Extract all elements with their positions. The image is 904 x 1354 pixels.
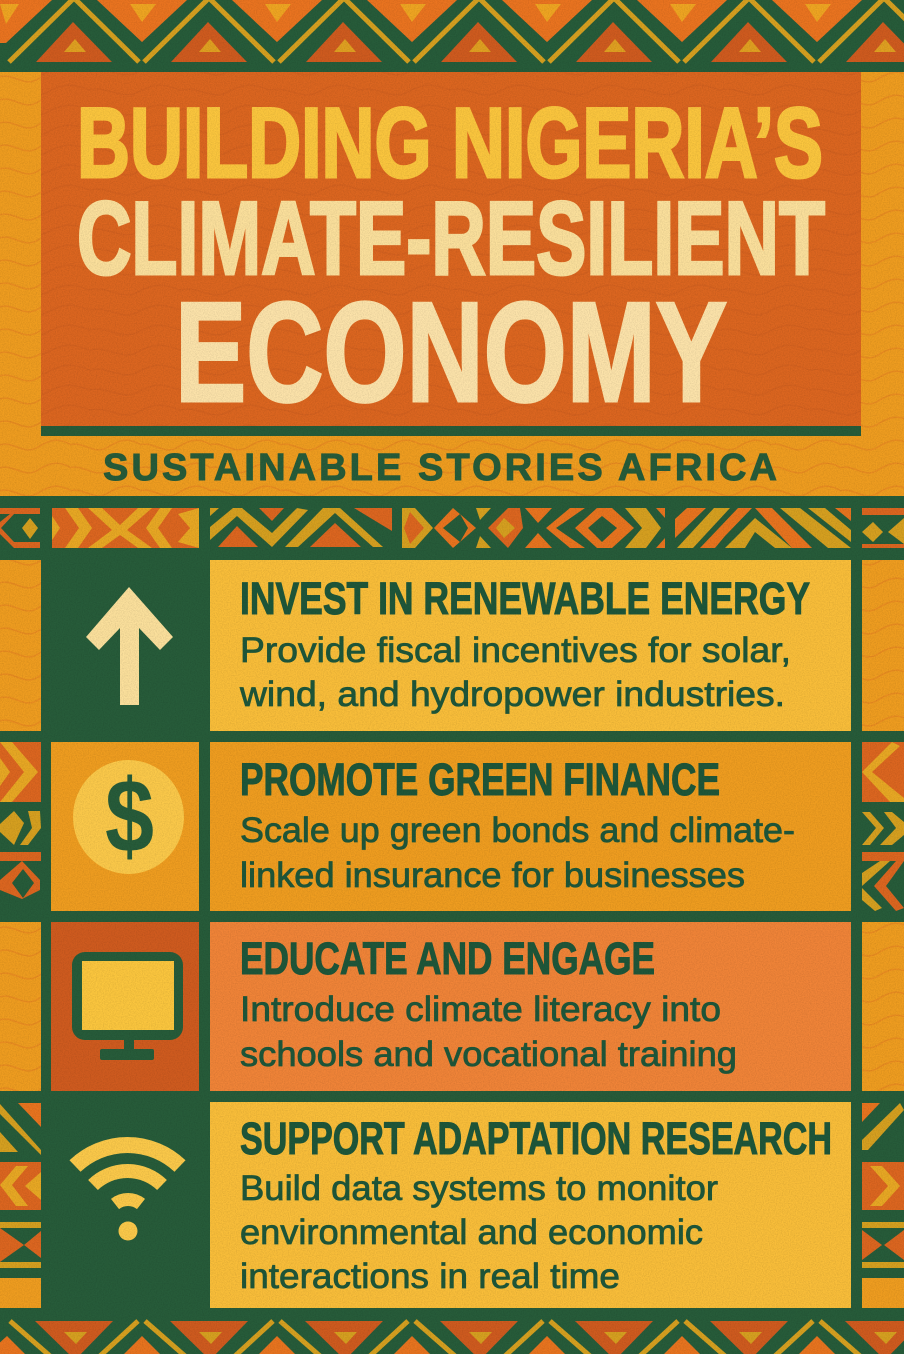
row 4 text panel — [210, 1102, 851, 1308]
row 2 text panel — [210, 742, 851, 911]
row 4 body: Build data systems to monitor — [240, 1169, 718, 1208]
title panel — [41, 72, 861, 436]
row 1 text panel — [210, 560, 851, 731]
band block: far-left fragment — [0, 508, 40, 548]
row 4 body: interactions in real time — [240, 1257, 620, 1296]
row 2: promote green finance — [51, 742, 851, 911]
band block: diagonals — [675, 508, 851, 548]
band block: diamonds — [434, 508, 665, 548]
icon: monitor — [72, 952, 183, 1060]
row 1 body: Provide fiscal incentives for solar, — [240, 631, 791, 670]
band block: far-right fragment — [862, 508, 904, 548]
icon: up arrow — [86, 587, 173, 705]
band block: chevrons — [52, 508, 199, 548]
row 3 body: schools and vocational training — [240, 1035, 737, 1074]
row 2 body — [240, 811, 795, 895]
header background panel — [0, 72, 904, 496]
band block: zigzag — [210, 508, 433, 548]
decorative pattern band — [0, 496, 904, 560]
row 4 body — [240, 1169, 718, 1296]
row 2 body: linked insurance for businesses — [240, 856, 745, 895]
row 2 heading: PROMOTE GREEN FINANCE — [240, 754, 720, 805]
icon: dollar coin: $ — [105, 759, 154, 875]
row 3 body — [240, 990, 737, 1074]
subtitle: SUSTAINABLE STORIES AFRICA — [103, 447, 777, 489]
row 3 icon cell — [51, 922, 199, 1091]
row 2 icon cell — [51, 742, 199, 911]
row 1: invest in renewable energy — [86, 560, 851, 731]
row 3 heading: EDUCATE AND ENGAGE — [240, 933, 655, 984]
icon: dollar coin — [73, 759, 184, 875]
row 3 body: Introduce climate literacy into — [240, 990, 721, 1029]
right side column patterns — [862, 560, 904, 1308]
row 3 text panel — [210, 922, 851, 1091]
row 4: support adaptation research — [75, 1102, 851, 1308]
bottom zigzag border — [0, 1308, 904, 1354]
title — [77, 87, 825, 432]
title: ECONOMY — [175, 273, 727, 432]
left side column patterns — [0, 560, 41, 1308]
row 1 body — [239, 631, 791, 714]
row 4 body: environmental and economic — [240, 1213, 703, 1252]
icon: wifi — [75, 1145, 180, 1240]
top zigzag border — [0, 0, 904, 72]
row 3: educate and engage — [51, 922, 851, 1091]
row 2 body: Scale up green bonds and climate- — [240, 811, 795, 850]
row 1 body: wind, and hydropower industries. — [239, 675, 785, 714]
